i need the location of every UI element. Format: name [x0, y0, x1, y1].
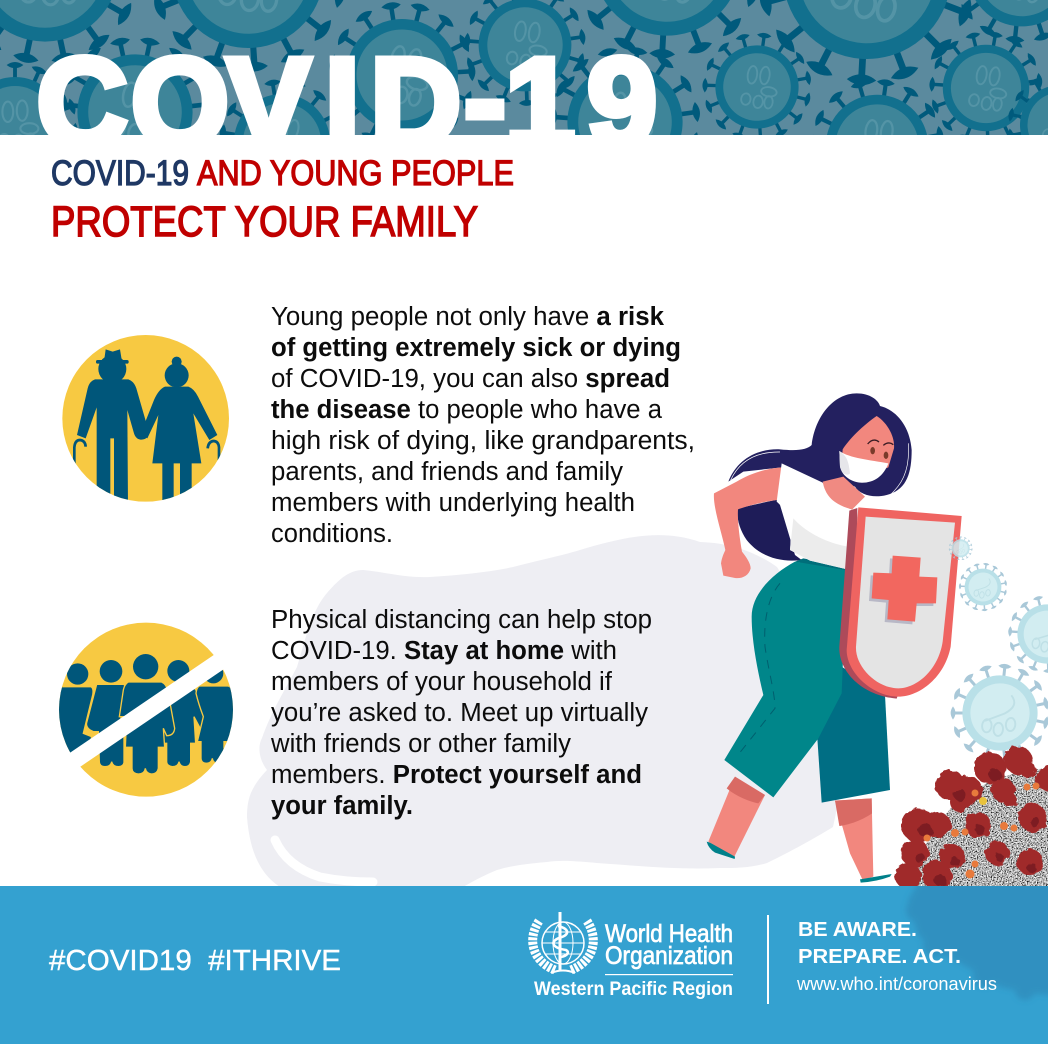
text block: physical distancing: members of your household if [271, 668, 613, 696]
text block: risk to family: high risk of dying, like grandparents, [271, 427, 695, 455]
text block: physical distancing: your family. [271, 792, 413, 820]
waistband [795, 558, 847, 570]
banner: virus pattern background [0, 0, 1048, 135]
eyes [868, 440, 893, 459]
background blob [247, 535, 860, 887]
text block: risk to family: of getting extremely sick or dying [271, 334, 681, 362]
text block: physical distancing: COVID-19. Stay at home with [271, 637, 617, 665]
text block: physical distancing: you’re asked to. Meet up virtually [271, 699, 648, 727]
text block: risk to family: conditions. [271, 520, 393, 548]
icon: elderly couple [62, 335, 229, 507]
footer band [0, 886, 1048, 1044]
logo: WHO emblem [533, 912, 593, 973]
lower hair [737, 499, 802, 561]
text block: risk to family [271, 303, 695, 548]
hashtags: #COVID19 #ITHRIVE [49, 945, 341, 977]
shield [839, 507, 962, 699]
virus spikes [895, 746, 1048, 890]
illustration: red coronavirus [895, 746, 1048, 890]
stitches [737, 583, 780, 757]
person 1 [59, 663, 92, 763]
orange dots [924, 782, 1040, 878]
call to action: BE AWARE. [798, 918, 917, 941]
blob highlight [275, 840, 373, 882]
person 4 [164, 660, 203, 766]
illustration: light virus particles [945, 560, 1048, 768]
elderly man [74, 349, 149, 507]
divider [767, 915, 769, 1004]
virus shadow in footer [906, 880, 1048, 1000]
person 3 [119, 654, 175, 774]
text block: risk to family: of COVID-19, you can also spread [271, 365, 670, 393]
icon: group of people crossed out [55, 623, 238, 797]
logo: WHO wordmark: Western Pacific Region [534, 979, 733, 1000]
logo: WHO wordmark [534, 920, 733, 1000]
call to action [796, 918, 997, 994]
neck [823, 477, 865, 510]
virus body [918, 768, 1048, 886]
elderly woman [141, 357, 219, 507]
hair strands [731, 443, 909, 503]
mask [839, 451, 888, 483]
logo: WHO wordmark: World Health [605, 920, 733, 948]
text block: physical distancing: members. Protect yourself and [271, 761, 642, 789]
heading: protect your family: PROTECT YOUR FAMILY [51, 199, 478, 246]
text block: risk to family: the disease to people who have a [271, 396, 663, 424]
text block: risk to family: parents, and friends and family [271, 458, 623, 486]
illustration: woman with shield [707, 393, 973, 883]
spike shading [915, 769, 1040, 886]
face [842, 416, 894, 480]
hair [728, 393, 912, 496]
front trouser leg [724, 562, 847, 797]
shoes [707, 842, 735, 859]
title: COVID-19: COVID-19 [37, 28, 657, 173]
text block: risk to family: Young people not only have a risk [271, 303, 665, 331]
heading: COVID-19 and young people: COVID-19 [51, 153, 189, 193]
person 5 [195, 670, 233, 764]
text block: physical distancing [270, 606, 652, 820]
person 2 [86, 660, 126, 767]
shirt [777, 463, 852, 569]
text block: risk to family: members with underlying health [271, 489, 635, 517]
back leg skin [835, 798, 873, 880]
call to action: PREPARE. ACT. [798, 945, 961, 968]
heading: COVID-19 and young people [51, 153, 514, 193]
heading: COVID-19 and young people: AND YOUNG PEOPLE [197, 153, 514, 193]
text block: physical distancing: Physical distancing can help stop [271, 606, 652, 634]
virus on shield edge [949, 536, 973, 560]
text block: physical distancing: with friends or other family [270, 730, 571, 758]
back trouser leg [817, 663, 890, 803]
front leg skin [708, 777, 765, 857]
arm and hand [714, 467, 782, 578]
call to action: www.who.int/coronavirus [796, 974, 997, 994]
logo: WHO wordmark: Organization [605, 942, 733, 970]
